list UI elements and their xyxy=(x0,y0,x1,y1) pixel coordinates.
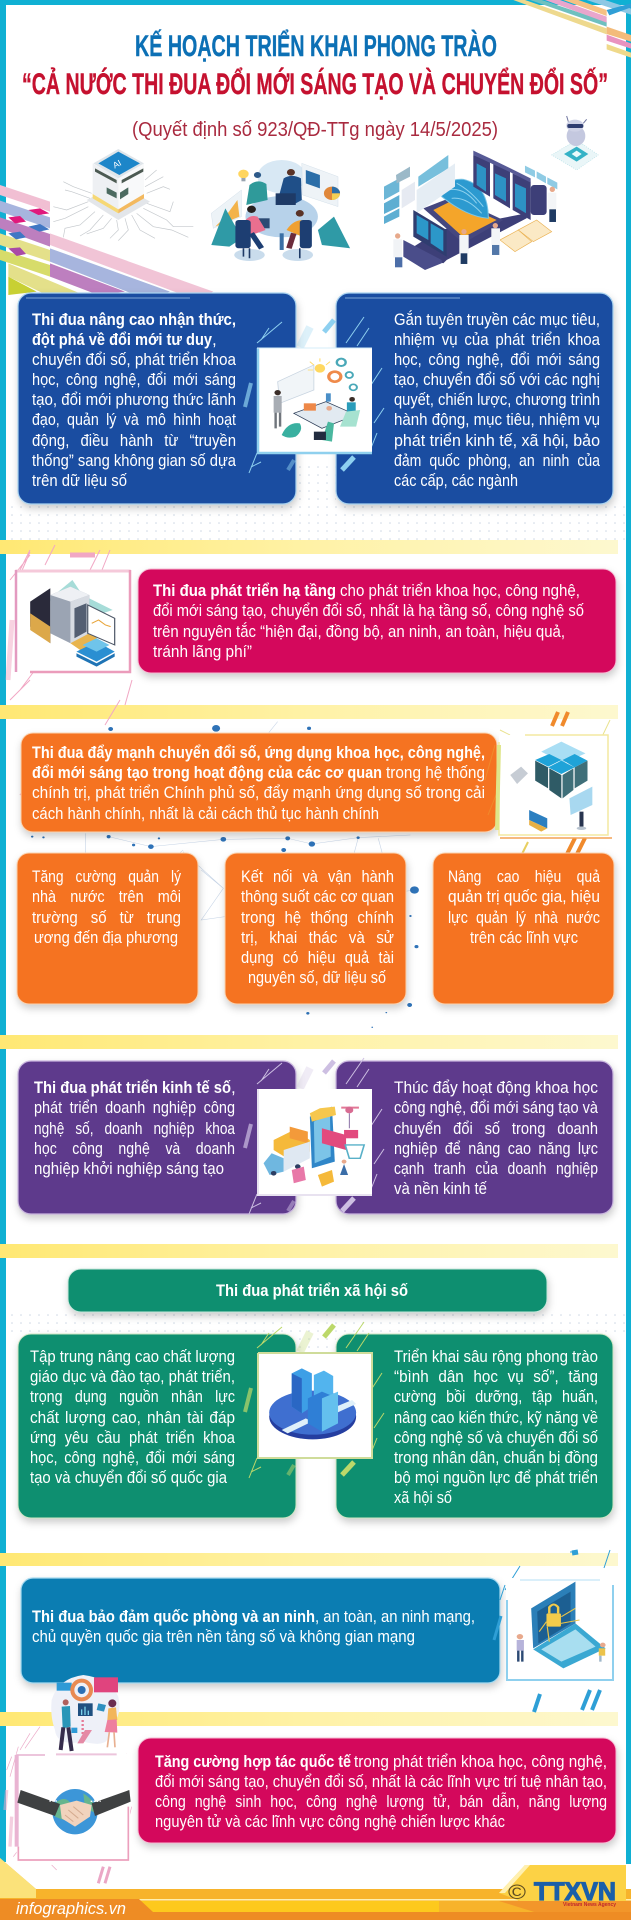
card: quản trị quốc gia xyxy=(433,853,614,1004)
heading: xã hội số: Thi đua phát triển xã hội số xyxy=(216,1281,408,1300)
panel: quốc phòng an ninh xyxy=(21,1578,500,1683)
panel: nhận thức right: học, công nghệ, đổi mới sáng xyxy=(394,350,600,369)
subtitle: (Quyết định số 923/QĐ-TTg ngày 14/5/2025) xyxy=(132,119,498,141)
card: quản lý nhà nước: Tăng cường quản lý xyxy=(32,867,181,886)
panel: kinh tế số right xyxy=(336,1061,613,1214)
separator bands xyxy=(0,540,618,1726)
card: kết nối vận hành: trị, khai thác và sử xyxy=(241,928,394,947)
card: quản trị quốc gia: Nâng cao hiệu quả xyxy=(448,867,600,886)
decoration: network behind orange panels xyxy=(31,722,419,1028)
panel: nhận thức right: các cấp, các ngành xyxy=(394,471,518,490)
panel: nhận thức left: đạo, quản lý và mô hình hoạt xyxy=(32,410,236,429)
decoration: dot waves xyxy=(6,460,626,1356)
panel: xã hội số right xyxy=(336,1334,613,1518)
panel: xã hội số left: ứng yêu cầu phát triển khoa xyxy=(30,1428,235,1447)
panel: nhận thức left: Thi đua nâng cao nhận thức, xyxy=(32,310,236,329)
panel: hạ tầng: trên nguyên tắc “hiện đại, đồng bộ, an ninh, an toàn, hiệu quả, xyxy=(153,622,565,641)
icon: AI chip: AI xyxy=(111,158,123,170)
card: quản lý nhà nước xyxy=(17,853,198,1004)
panel: nhận thức right: quyết, chiến lược, chương trình xyxy=(394,390,600,409)
panel: xã hội số left: tạo và chuyển đổi số quốc gia xyxy=(30,1468,227,1487)
panel: xã hội số right: nâng cao kiến thức, kỹ năng về xyxy=(394,1408,598,1427)
panel: quốc phòng an ninh: chủ quyền quốc gia trên nền tảng số và không gian mạng xyxy=(32,1627,415,1646)
panel: nhận thức right xyxy=(336,293,613,504)
image card: cyber security xyxy=(494,1550,614,1712)
card: kết nối vận hành: Kết nối và vận hành xyxy=(241,867,394,886)
image card: e-commerce xyxy=(245,1058,384,1214)
panel: kinh tế số right: và nền kinh tế xyxy=(394,1179,487,1198)
card: kết nối vận hành: dụng có hiệu quả tài xyxy=(241,948,394,967)
panel: xã hội số left: trọng dụng nguồn nhân lực xyxy=(30,1387,235,1406)
panel: nhận thức right: hành động, mục tiêu, nhiệm vụ xyxy=(394,410,600,429)
icon: AI chip xyxy=(53,149,193,241)
footer band xyxy=(0,1858,631,1920)
card: kết nối vận hành: nguyên số, dữ liệu số xyxy=(248,968,386,987)
logo: TTXVN: Vietnam News Agency xyxy=(563,1902,616,1908)
card: quản trị quốc gia: lực quản lý nhà nước xyxy=(448,908,600,927)
panel: kinh tế số right: nghiệp để nâng cao năng lực xyxy=(394,1139,598,1158)
panel: nhận thức left: đột phá về đổi mới tư duy xyxy=(32,330,212,349)
panel: xã hội số right: xã hội số xyxy=(394,1488,452,1507)
icon: meeting around table xyxy=(211,160,350,261)
panel: kinh tế số left: Thi đua phát triển kinh tế số xyxy=(34,1078,231,1097)
heading: xã hội số xyxy=(68,1269,547,1312)
card: quản trị quốc gia: trên các lĩnh vực xyxy=(470,928,578,947)
panel: nhận thức right: nhiệm vụ của phát triển khoa xyxy=(394,330,600,349)
panel: chuyển đổi số main: chính trị, phát triển Chính phủ số, đẩy mạnh ứng dụng số trong cải xyxy=(32,783,485,802)
image card: smart city xyxy=(245,1322,384,1478)
panel: kinh tế số left: nghệ số, doanh nghiệp khoa xyxy=(34,1119,235,1138)
panel: nhận thức left: chuyển đổi số, phát triển khoa xyxy=(32,350,236,369)
panel: hạ tầng: Thi đua phát triển hạ tầng xyxy=(153,581,336,600)
panel: nhận thức left: trên dữ liệu số xyxy=(32,471,127,490)
panel: xã hội số left: giáo dục và đào tạo, phát triển, xyxy=(30,1367,235,1386)
image card: digital government servers xyxy=(485,712,612,858)
card: quản trị quốc gia: quản trị quốc gia, hiệu xyxy=(448,887,600,906)
panel: nhận thức right: Gắn tuyên truyền các mục tiêu, xyxy=(394,310,600,329)
panel: nhận thức left xyxy=(18,293,296,504)
card: quản lý nhà nước: trường số từ trung xyxy=(32,908,181,927)
panel: kinh tế số left xyxy=(18,1061,296,1214)
panel: nhận thức left: , xyxy=(212,330,217,349)
panel: nhận thức right: tạo, chuyển đổi số với các nghị xyxy=(394,370,600,389)
panel: chuyển đổi số main: Thi đua đẩy mạnh chuyển đổi số, ứng dụng khoa học, công nghệ, xyxy=(32,743,485,762)
card: kết nối vận hành: thông suốt các cơ quan xyxy=(241,887,394,906)
panel: nhận thức left: thống” sang không gian số dựa xyxy=(32,451,236,470)
panel: nhận thức left: động, điều hành từ “truyền xyxy=(32,431,236,450)
panel: quốc phòng an ninh: , an toàn, an ninh mạng, xyxy=(315,1607,475,1626)
panel: hợp tác quốc tế: nguyên tử và các lĩnh vực công nghệ chiến lược khác xyxy=(155,1812,505,1831)
panel: kinh tế số left: nghiệp khởi nghiệp sáng tạo xyxy=(34,1159,224,1178)
panel: chuyển đổi số main xyxy=(21,733,497,832)
logo: TTXVN: © xyxy=(508,1882,526,1904)
panel: xã hội số left: chất lượng cao, nhân tài đáp xyxy=(30,1408,235,1427)
image card: team planning xyxy=(245,317,384,473)
icon: data analysts xyxy=(51,1675,119,1751)
panel: kinh tế số right: chuyển đổi số trong doanh xyxy=(394,1119,598,1138)
panel: xã hội số right: Triển khai sâu rộng phong trào xyxy=(394,1347,598,1366)
panel: hạ tầng xyxy=(138,569,616,673)
panel: hợp tác quốc tế: Tăng cường hợp tác quốc tế xyxy=(155,1752,351,1771)
decoration: left ribbons xyxy=(0,185,213,300)
card: quản lý nhà nước: nhà nước trên môi xyxy=(32,887,181,906)
panel: xã hội số right: công nghệ số và chuyển đổi số xyxy=(394,1428,598,1447)
panel: hợp tác quốc tế xyxy=(138,1738,616,1843)
panel: nhận thức left: tạo, đổi mới phương thức lãnh xyxy=(32,390,236,409)
image card: server infrastructure xyxy=(8,545,132,795)
card: kết nối vận hành: trong hệ thống chính xyxy=(241,908,394,927)
panel: kinh tế số right: Thúc đẩy hoạt động khoa học xyxy=(394,1078,598,1097)
panel: chuyển đổi số main: trong hệ thống xyxy=(386,763,485,782)
panel: hạ tầng: cho phát triển khoa học, công nghệ, xyxy=(340,581,580,600)
panel: kinh tế số left: phát triển doanh nghiệp công xyxy=(34,1098,235,1117)
panel: xã hội số left xyxy=(18,1334,296,1518)
panel: xã hội số right: “bình dân học vụ số”, tăng xyxy=(394,1367,598,1386)
panel: kinh tế số left: , xyxy=(231,1078,236,1097)
title xyxy=(22,29,608,101)
panel: xã hội số left: Tập trung nâng cao chất lượng xyxy=(30,1347,235,1366)
logo: TTXVN: TTXVN xyxy=(534,1878,616,1906)
panel: chuyển đổi số main: đổi mới sáng tạo trong hoạt động của các cơ quan xyxy=(32,763,382,782)
card: quản lý nhà nước: ương đến địa phương xyxy=(34,928,178,947)
panel: xã hội số left: học, công nghệ, đổi mới sáng xyxy=(30,1448,235,1467)
panel: kinh tế số left: học công nghệ và doanh xyxy=(34,1139,235,1158)
decoration: top right ribbons xyxy=(513,0,631,58)
panel: nhận thức right: phát triển kinh tế, xã hội, bảo xyxy=(394,431,600,450)
panel: quốc phòng an ninh: Thi đua bảo đảm quốc phòng và an ninh xyxy=(32,1607,315,1626)
card: kết nối vận hành xyxy=(225,853,406,1004)
panel: xã hội số right: bộ mọi nguồn lực để phát triển xyxy=(394,1468,598,1487)
panel: hợp tác quốc tế: trong phát triển khoa học, công nghệ, xyxy=(354,1752,607,1771)
icon: AI brain laboratory xyxy=(384,151,557,270)
image card: international handshake xyxy=(5,1727,132,1883)
panel: xã hội số right: cường bồi dưỡng, tập huấn, xyxy=(394,1387,598,1406)
panel: nhận thức left: học, công nghệ, đổi mới sáng xyxy=(32,370,236,389)
panel: hạ tầng: tránh lãng phí” xyxy=(153,642,252,661)
panel: kinh tế số right: công nghệ, đổi mới sáng tạo và xyxy=(394,1098,598,1117)
website label: infographics.vn xyxy=(16,1899,126,1918)
panel: xã hội số right: trong nhân dân, chuẩn bị đồng xyxy=(394,1448,598,1467)
panel: chuyển đổi số main: cách hành chính, nhất là cải cách thủ tục hành chính xyxy=(32,804,379,823)
icon: small robot xyxy=(552,116,598,170)
